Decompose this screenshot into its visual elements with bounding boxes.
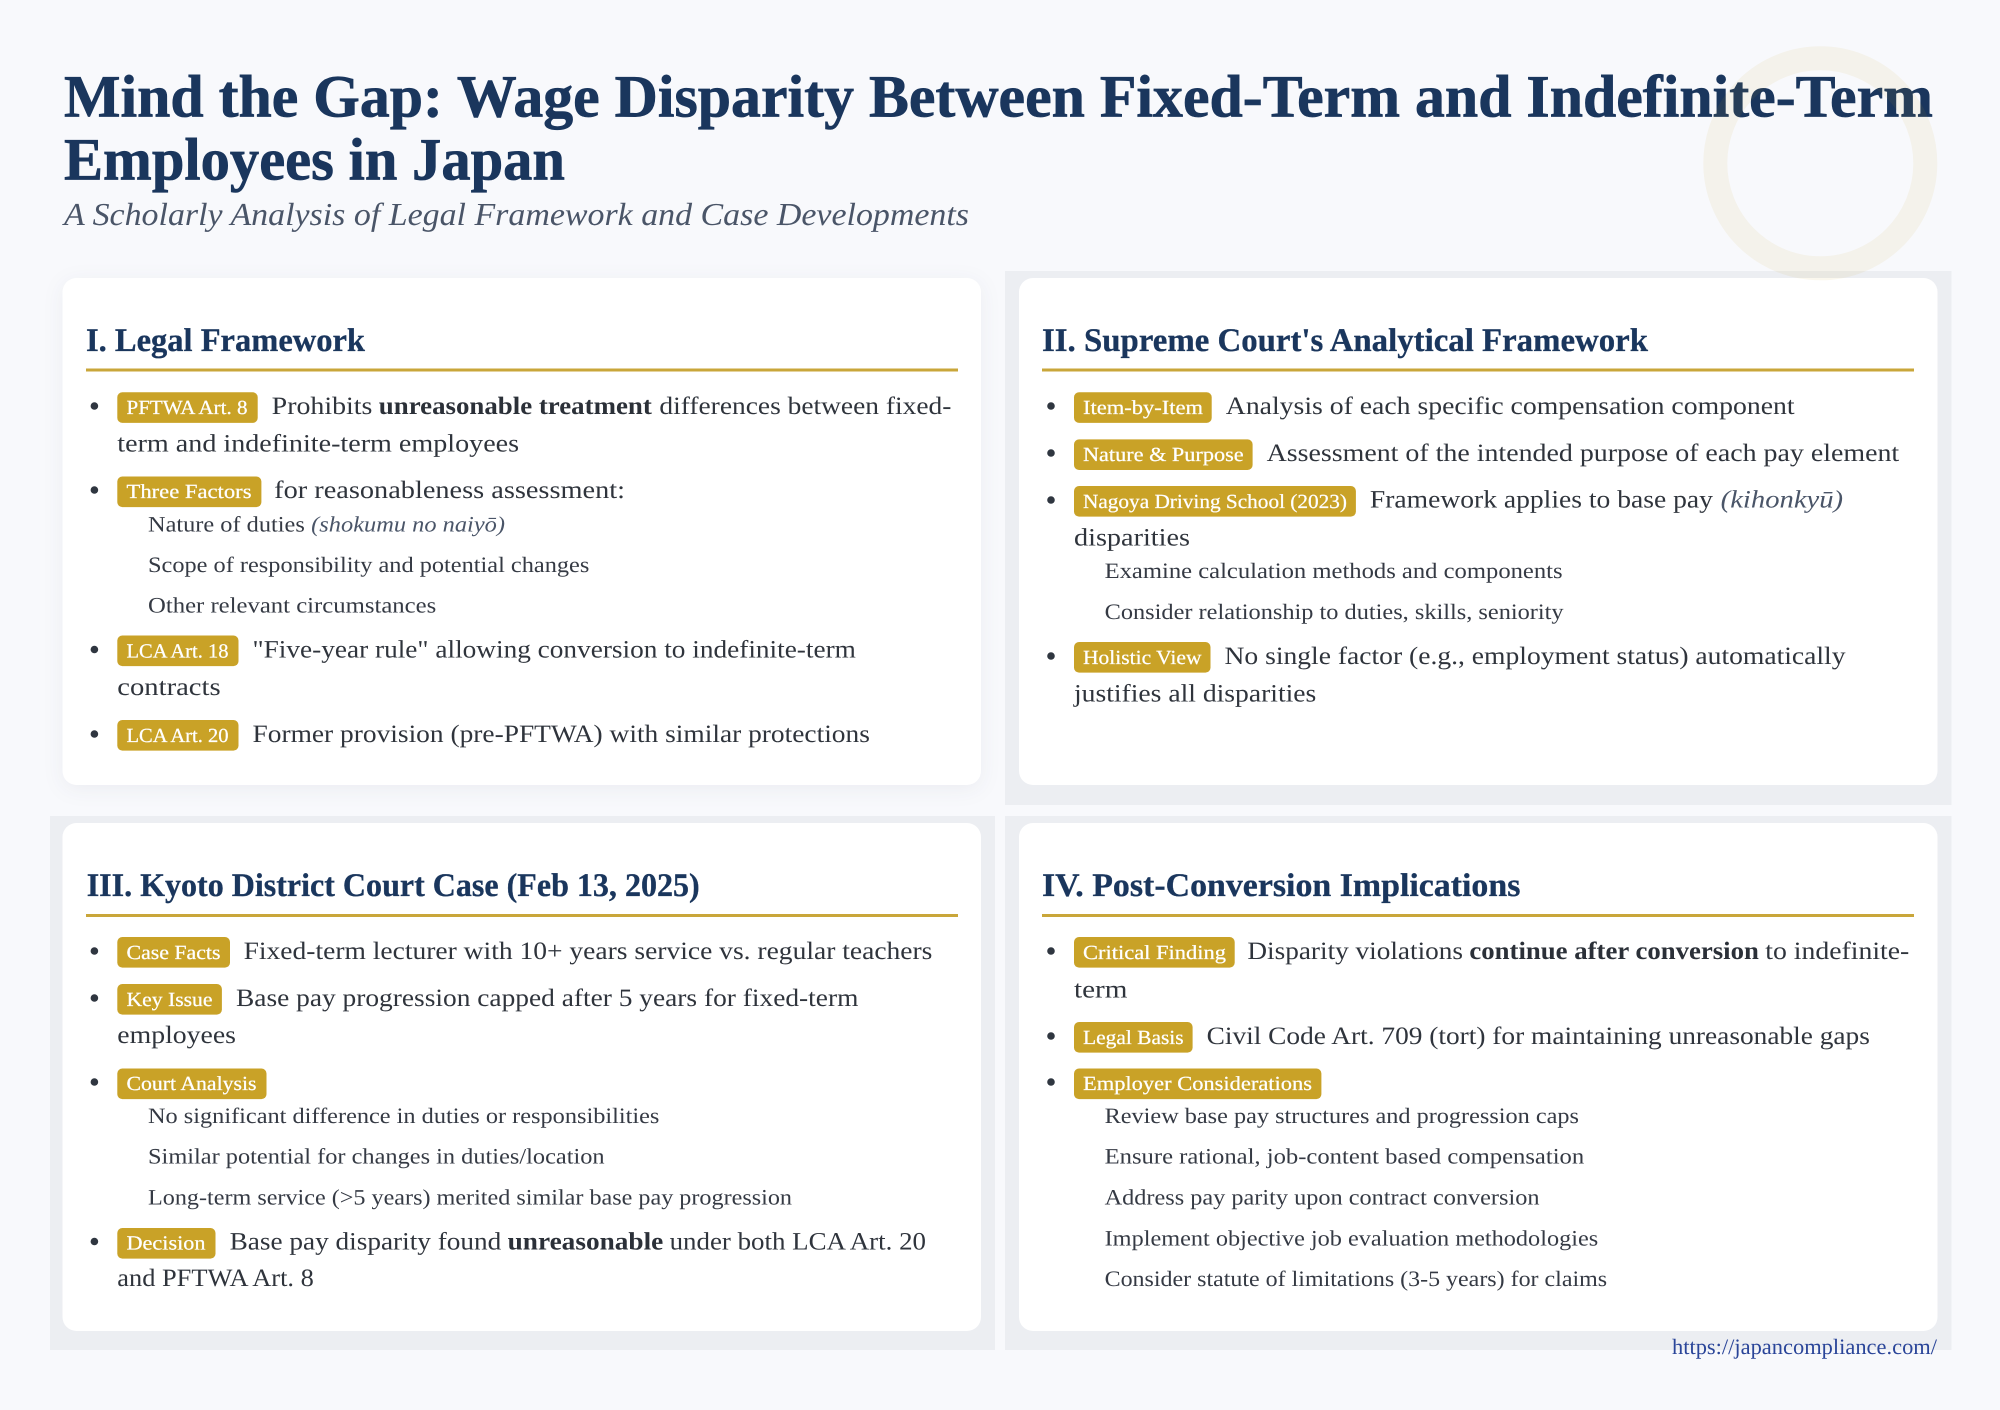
heading II: II. Supreme Court's Analytical Framework <box>1042 323 1649 359</box>
item: Legal Basis <box>1047 1022 1870 1053</box>
item: LCA Art. 18: contracts <box>117 674 221 701</box>
item: Nagoya Driving School (2023) <box>1047 486 1843 624</box>
item: Key Issue: Base pay progression capped after 5 years for fixed-term <box>236 985 859 1012</box>
item: Nagoya Driving School (2023): Nagoya Driving School (2023) <box>1083 491 1347 513</box>
subtitle: A Scholarly Analysis of Legal Framework and Case Developments <box>62 196 969 232</box>
item: LCA Art. 20: LCA Art. 20 <box>126 725 228 747</box>
item: Nagoya Driving School (2023): Consider relationship to duties, skills, seniority <box>1105 599 1564 624</box>
item: Nagoya Driving School (2023): Examine calculation methods and components <box>1105 558 1563 583</box>
item: Decision: and PFTWA Art. 8 <box>117 1265 314 1292</box>
item: Three Factors: (shokumu no naiyō) <box>311 512 505 536</box>
item: Court Analysis: Court Analysis <box>126 1073 257 1095</box>
item: Decision: under both LCA Art. 20 <box>670 1228 926 1256</box>
card III <box>62 823 981 1331</box>
item: PFTWA Art. 8: term and indefinite-term employees <box>117 431 519 458</box>
item: Employer Considerations: Consider statute of limitations (3-5 years) for claims <box>1105 1266 1607 1291</box>
decorative ring <box>1715 58 1925 268</box>
item: Employer Considerations: Ensure rational, job-content based compensation <box>1105 1144 1584 1169</box>
item: Three Factors: for reasonableness assessment: <box>274 477 625 504</box>
card II <box>1019 278 1938 785</box>
panel: II. Supreme Court's Analytical Framework <box>1005 271 1952 805</box>
item: Three Factors: Other relevant circumstances <box>148 592 436 618</box>
item: LCA Art. 18: "Five-year rule" allowing conversion to indefinite-term <box>252 636 856 664</box>
item: PFTWA Art. 8 <box>91 392 951 458</box>
title: Employees in Japan <box>64 126 565 192</box>
item: Employer Considerations: Employer Considerations <box>1083 1073 1312 1095</box>
item: Decision: Decision <box>126 1232 206 1254</box>
heading I: I. Legal Framework <box>86 323 366 359</box>
item: Holistic View <box>1047 642 1846 708</box>
item: Court Analysis <box>91 1068 792 1210</box>
title: Mind the Gap: Wage Disparity Between Fixed-Term and Indefinite-Term <box>64 64 1933 131</box>
item: Nature & Purpose <box>1047 439 1899 470</box>
item: Item-by-Item: Item-by-Item <box>1083 397 1203 419</box>
item: Critical Finding: term <box>1074 976 1128 1004</box>
item: Three Factors <box>91 476 625 618</box>
item: Nature & Purpose: Nature & Purpose <box>1083 444 1244 466</box>
item: Holistic View: justifies all disparities <box>1073 680 1316 708</box>
item: Three Factors: Nature of duties <box>148 512 305 536</box>
title <box>64 64 1933 192</box>
item: Critical Finding: Disparity violations <box>1247 938 1463 965</box>
item: Case Facts: Case Facts <box>126 942 221 964</box>
item: Holistic View: No single factor (e.g., employment status) automatically <box>1224 643 1846 670</box>
item: Employer Considerations: Implement objective job evaluation methodologies <box>1105 1225 1598 1250</box>
item: LCA Art. 20: Former provision (pre-PFTWA) with similar protections <box>252 721 870 748</box>
item: Key Issue: employees <box>117 1022 236 1049</box>
item: Nagoya Driving School (2023): Framework applies to base pay <box>1370 486 1713 514</box>
item: Case Facts <box>91 937 932 968</box>
title block <box>62 64 1933 232</box>
item: Key Issue: Key Issue <box>126 989 213 1011</box>
item: PFTWA Art. 8: PFTWA Art. 8 <box>126 397 248 419</box>
panel IV backdrop <box>1005 816 1952 1350</box>
item: Three Factors: Scope of responsibility and potential changes <box>148 552 589 577</box>
source link: https://japancompliance.com/ <box>1672 1334 1938 1359</box>
item: PFTWA Art. 8: Prohibits <box>272 393 372 420</box>
item: Nature & Purpose: Assessment of the intended purpose of each pay element <box>1267 440 1899 467</box>
heading III: III. Kyoto District Court Case (Feb 13, 2025) <box>87 868 700 904</box>
item: Decision: Base pay disparity found <box>230 1228 502 1256</box>
item: Critical Finding: Critical Finding <box>1083 942 1226 964</box>
item: Court Analysis: Similar potential for changes in duties/location <box>148 1144 605 1169</box>
card I <box>62 278 981 785</box>
item: Decision: unreasonable <box>508 1228 663 1256</box>
item: Court Analysis: No significant difference in duties or responsibilities <box>148 1103 659 1128</box>
panel: I. Legal Framework <box>62 278 981 785</box>
panel II backdrop <box>1005 271 1952 805</box>
item: Nagoya Driving School (2023): (kihonkyū) <box>1721 486 1843 514</box>
item: Critical Finding <box>1047 937 1909 1004</box>
item: Employer Considerations: Review base pay structures and progression caps <box>1105 1103 1579 1128</box>
item: Critical Finding: to indefinite- <box>1765 938 1909 965</box>
item: PFTWA Art. 8: differences between fixed- <box>659 393 951 420</box>
item: Three Factors: Three Factors <box>126 481 252 503</box>
item: Holistic View: Holistic View <box>1083 647 1202 669</box>
item: Legal Basis: Civil Code Art. 709 (tort) for maintaining unreasonable gaps <box>1207 1023 1870 1050</box>
item: PFTWA Art. 8: unreasonable treatment <box>379 393 653 420</box>
item: LCA Art. 18 <box>91 636 856 701</box>
panel: III. Kyoto District Court Case <box>50 816 995 1350</box>
panel: IV. Post-Conversion Implications <box>1005 816 1952 1350</box>
item: Legal Basis: Legal Basis <box>1083 1027 1184 1049</box>
item: Nagoya Driving School (2023): disparities <box>1074 524 1190 552</box>
item: Critical Finding: continue after conversion <box>1469 938 1759 965</box>
item: Item-by-Item: Analysis of each specific compensation component <box>1226 393 1795 420</box>
item: Decision <box>91 1228 926 1292</box>
panel III backdrop <box>50 816 995 1350</box>
item: Item-by-Item <box>1047 392 1795 423</box>
item: LCA Art. 18: LCA Art. 18 <box>126 640 228 662</box>
item: Employer Considerations <box>1047 1068 1607 1291</box>
card IV <box>1019 823 1938 1331</box>
item: Employer Considerations: Address pay parity upon contract conversion <box>1105 1185 1540 1210</box>
item: Court Analysis: Long-term service (>5 years) merited similar base pay progression <box>148 1185 792 1210</box>
item: Key Issue <box>91 984 859 1049</box>
heading IV: IV. Post-Conversion Implications <box>1042 868 1521 904</box>
item: Case Facts: Fixed-term lecturer with 10+ years service vs. regular teachers <box>244 938 932 965</box>
item: LCA Art. 20 <box>91 720 870 751</box>
